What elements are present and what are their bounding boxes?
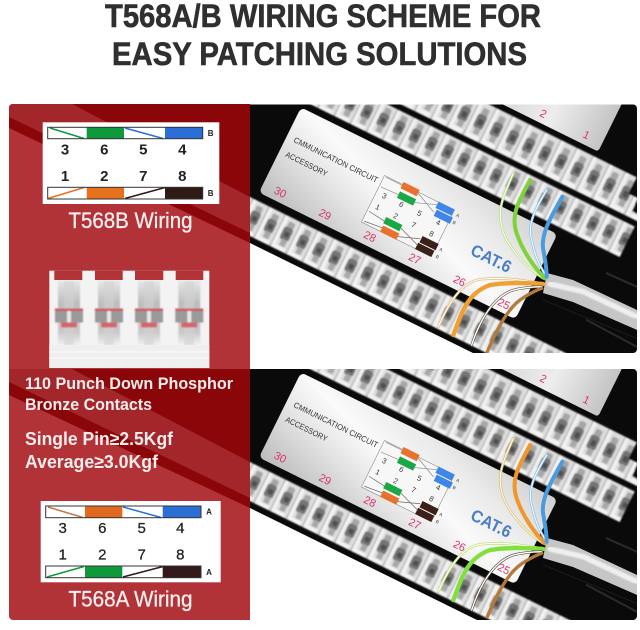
panel: red wiring sidebar: [9, 104, 250, 620]
mini wiring diagram: 2: [392, 211, 400, 221]
title: [105, 0, 541, 72]
port numbers 25 to 30: 29: [317, 207, 333, 223]
T568A wiring diagram: 8: [176, 546, 184, 564]
silver label plate: [259, 372, 557, 584]
mini wiring diagram: 3: [381, 456, 388, 466]
mini wiring diagram: A: [439, 247, 443, 253]
mini wiring diagram: 1: [374, 467, 382, 477]
text: pull force specs: Single Pin≥2.5Kgf: [25, 429, 174, 449]
plate caption: ACCESSORY: [284, 150, 330, 179]
T568B wiring diagram: 7: [139, 168, 147, 185]
mini wiring diagram: 8: [428, 229, 435, 239]
plate with port numbers 2 and 1: [502, 369, 622, 416]
plate caption: CMMUNICATION CIRCUIT: [292, 135, 380, 185]
T568B wiring diagram: 5: [139, 142, 147, 158]
text: pull force specs: [25, 429, 174, 472]
port numbers 25 to 30: 27: [406, 516, 423, 532]
T568A wiring diagram: [41, 501, 221, 582]
mini wiring diagram: 7: [410, 485, 417, 495]
port numbers 25 to 30: 30: [272, 185, 288, 201]
T568B wiring diagram: 6: [100, 142, 108, 158]
photo: T568B patch panel: [250, 104, 637, 353]
mini wiring diagram: B: [435, 519, 440, 525]
cable and wires: [438, 438, 637, 617]
T568B Wiring label: T568B Wiring: [68, 208, 192, 233]
T568B wiring diagram: 4: [178, 142, 187, 158]
mini wiring diagram: B: [452, 485, 457, 491]
plate with port numbers 2 and 1: 2: [538, 108, 548, 121]
T568B wiring diagram: B: [208, 189, 214, 198]
text: punch down phosphor bronze contacts: [26, 377, 233, 410]
mini wiring diagram: 8: [428, 494, 435, 504]
text: punch down phosphor bronze contacts: 110 Punch Down Phosphor: [25, 374, 233, 393]
photo: T568A patch panel: [250, 369, 637, 620]
port numbers 25 to 30: 26: [451, 273, 467, 290]
T568B wiring diagram: B: [208, 129, 214, 138]
T568A wiring diagram: 2: [98, 546, 106, 564]
mini wiring diagram: 2: [392, 476, 400, 486]
port numbers 25 to 30: [271, 450, 512, 578]
port numbers 25 to 30: 28: [361, 229, 378, 245]
text: pull force specs: Average≥3.0Kgf: [25, 452, 159, 472]
plate with port numbers 2 and 1: 2: [538, 373, 548, 386]
T568A wiring diagram: A: [206, 568, 212, 577]
middle jack row: [308, 104, 636, 258]
plate caption: CMMUNICATION CIRCUIT: [292, 400, 380, 450]
T568B wiring diagram: 3: [61, 142, 69, 158]
mini wiring diagram: B: [435, 254, 440, 260]
T568B wiring diagram: 8: [178, 168, 186, 185]
port numbers 25 to 30: 30: [272, 450, 288, 466]
mini wiring diagram: A: [439, 512, 443, 518]
mini wiring diagram: 6: [398, 464, 405, 474]
mini wiring diagram: [361, 438, 462, 525]
mini wiring diagram: A: [455, 478, 460, 483]
plate with port numbers 2 and 1: 1: [581, 394, 591, 407]
T568A wiring diagram: 6: [98, 520, 106, 537]
title: EASY PATCHING SOLUTIONS: [112, 36, 527, 72]
port numbers 25 to 30: [271, 185, 512, 313]
white background below panel: [250, 508, 477, 620]
port numbers 25 to 30: 26: [451, 538, 467, 555]
plate with port numbers 2 and 1: 1: [581, 129, 591, 142]
T568B wiring diagram: [43, 122, 219, 204]
mini wiring diagram: 5: [415, 208, 423, 218]
T568A wiring diagram: A: [206, 508, 212, 516]
plate with port numbers 2 and 1: [503, 104, 622, 151]
top jack row: [398, 369, 637, 487]
cable and wires: [438, 173, 637, 352]
mini wiring diagram: 3: [381, 191, 388, 201]
mini wiring diagram: [361, 173, 462, 260]
CAT.6 label: CAT.6: [468, 506, 515, 542]
port numbers 25 to 30: 28: [361, 494, 378, 510]
port numbers 25 to 30: 25: [495, 561, 512, 578]
silver label plate: [259, 107, 557, 319]
T568A Wiring label: T568A Wiring: [68, 587, 192, 612]
text: punch down phosphor bronze contacts: Bronze Contacts: [25, 395, 152, 414]
mini wiring diagram: A: [455, 213, 460, 218]
mini wiring diagram: B: [452, 220, 457, 226]
mini wiring diagram: 6: [398, 199, 405, 209]
mini wiring diagram: 4: [434, 218, 442, 228]
T568A wiring diagram: 5: [138, 520, 146, 537]
T568B wiring diagram: 2: [100, 168, 108, 185]
mini wiring diagram: 5: [415, 473, 423, 483]
port numbers 25 to 30: 27: [406, 251, 423, 267]
mini wiring diagram: 7: [410, 220, 417, 230]
illustration: punch down contacts: [49, 271, 209, 368]
mini wiring diagram: 1: [374, 202, 382, 212]
white background below panel: [250, 243, 473, 353]
top jack row: [399, 104, 637, 222]
T568B wiring diagram: 1: [61, 168, 69, 185]
T568A wiring diagram: 3: [59, 520, 67, 537]
middle jack row: [308, 369, 636, 523]
bottom jack row: [250, 196, 568, 353]
port numbers 25 to 30: 29: [317, 472, 333, 488]
mini wiring diagram: 4: [434, 483, 442, 493]
CAT.6 label: CAT.6: [468, 241, 515, 277]
T568A wiring diagram: 4: [176, 520, 184, 537]
port numbers 25 to 30: 25: [495, 296, 512, 313]
plate caption: ACCESSORY: [284, 415, 330, 444]
bottom jack row: [250, 460, 572, 620]
T568A wiring diagram: 7: [138, 546, 146, 564]
T568A wiring diagram: 1: [59, 546, 67, 564]
